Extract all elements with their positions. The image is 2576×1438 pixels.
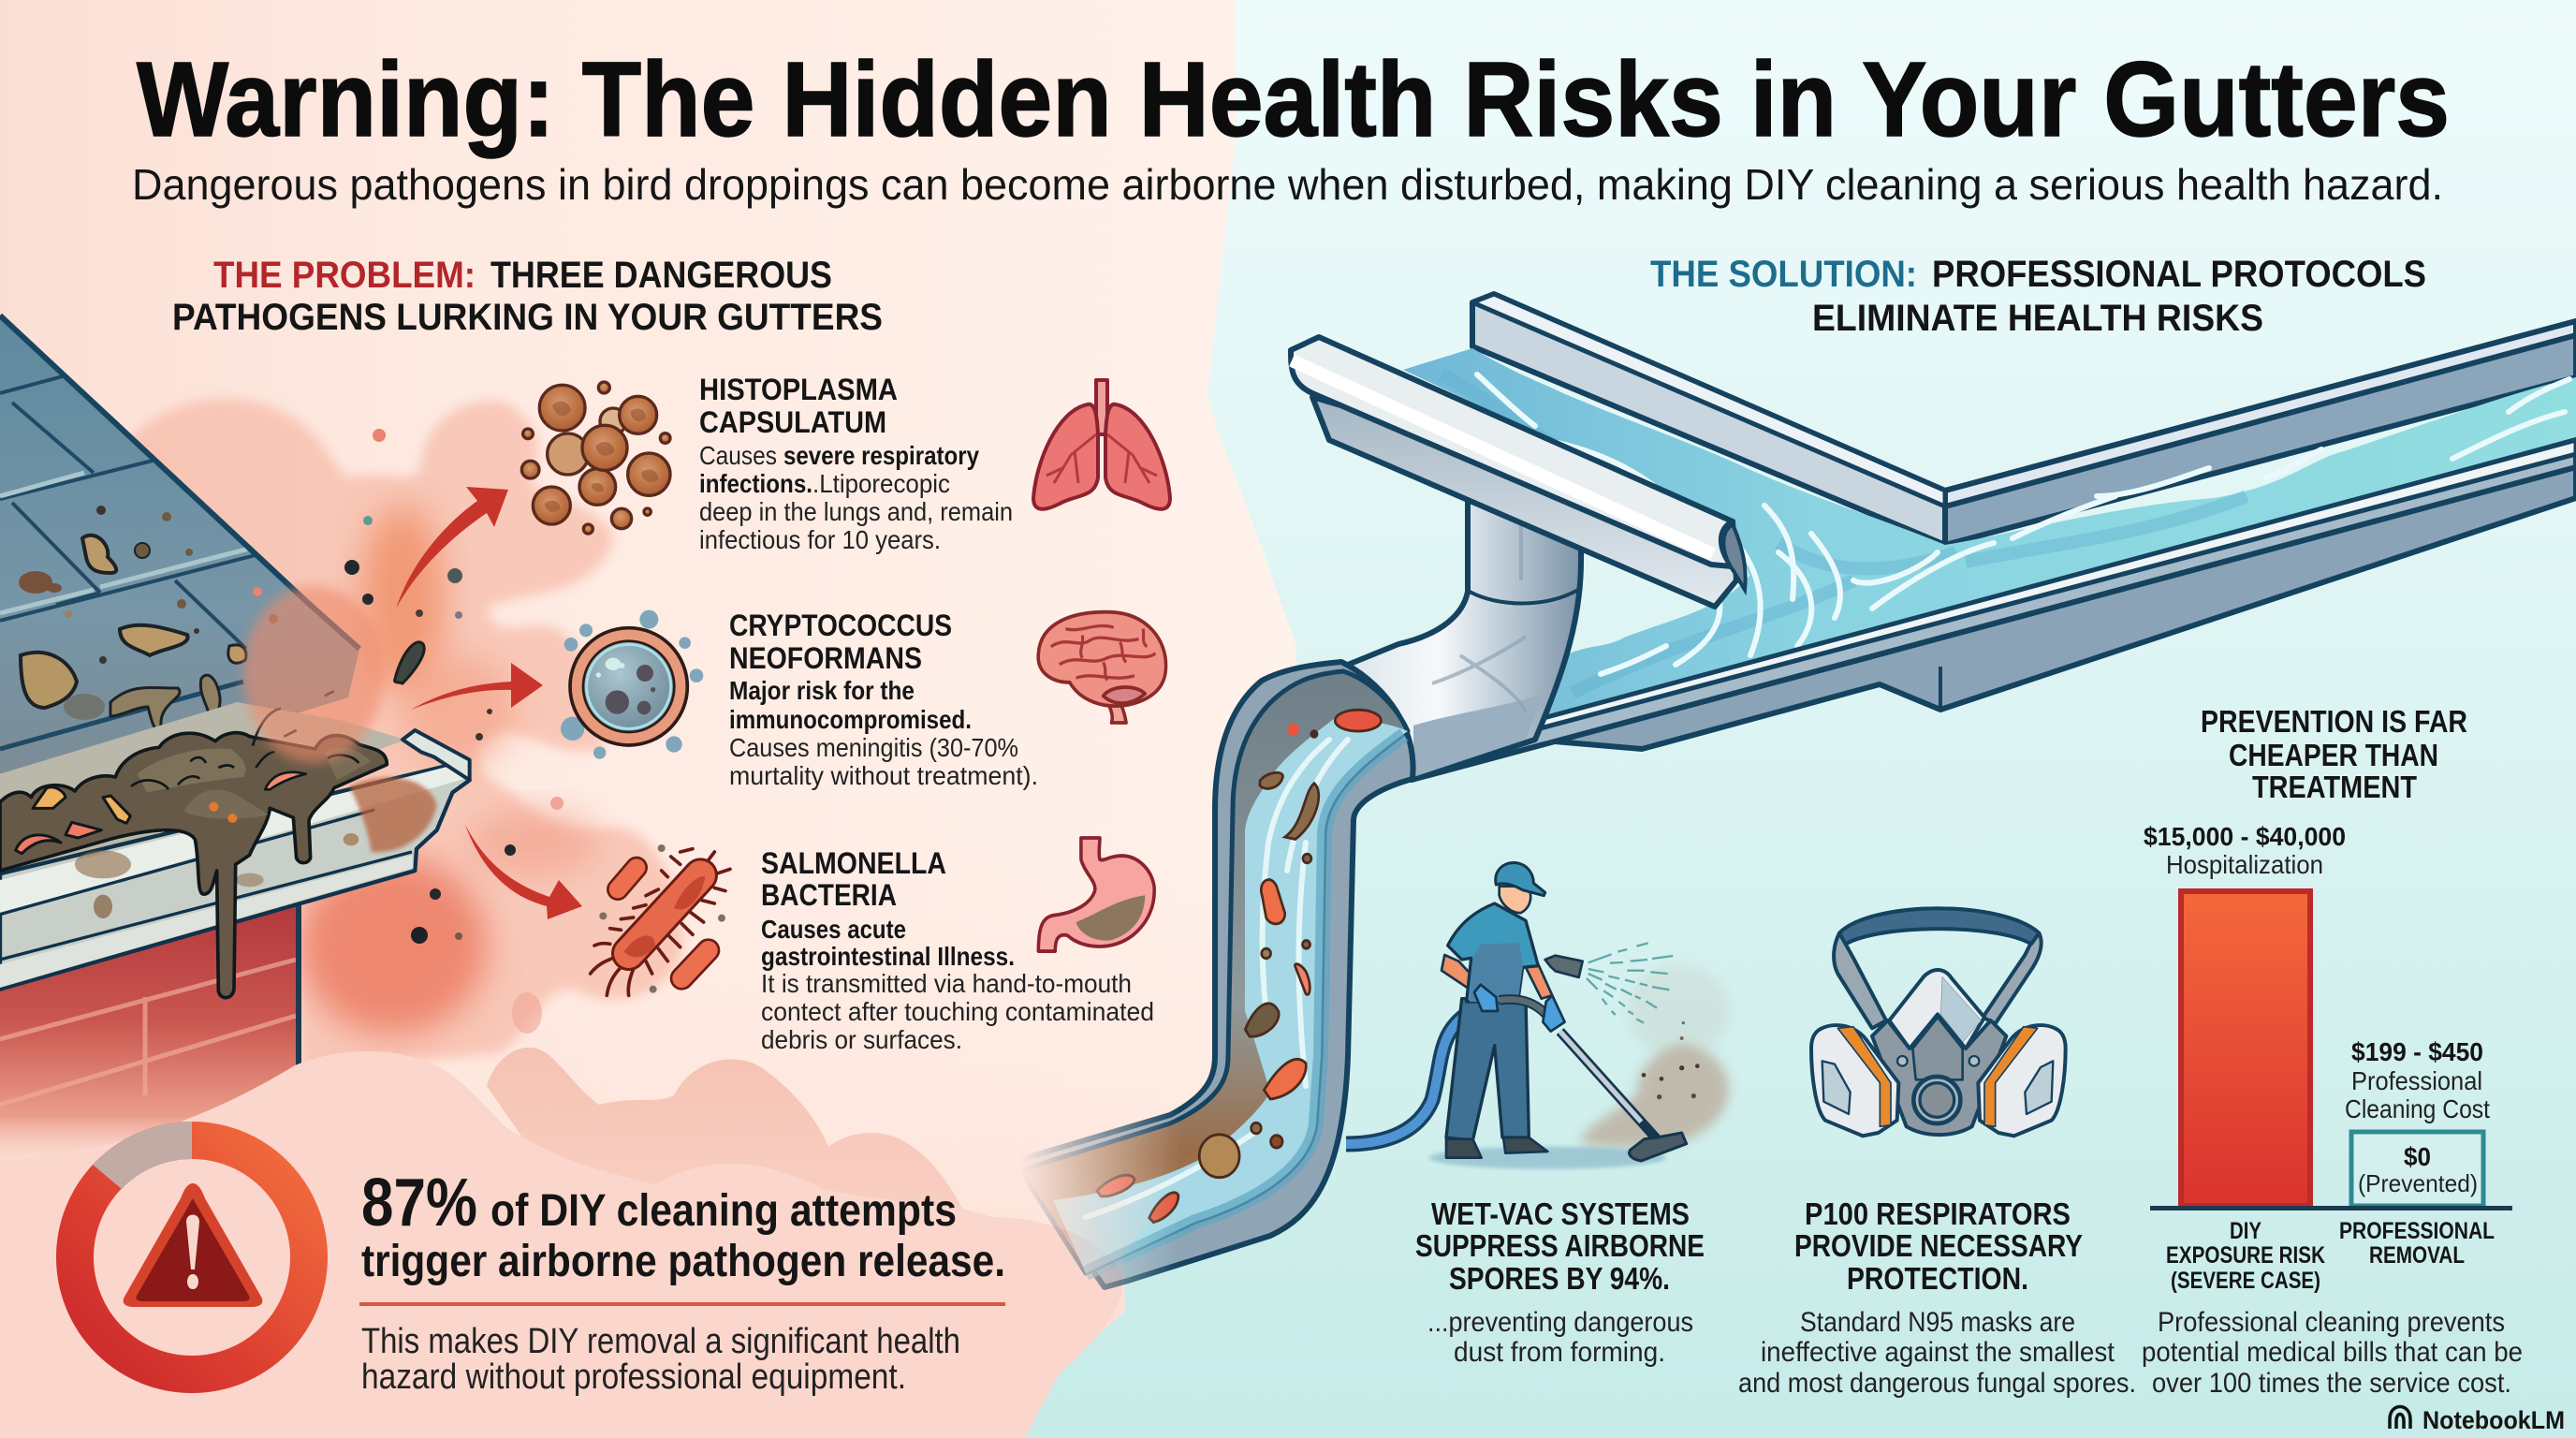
shoes [1446, 1137, 1547, 1158]
gutter body [0, 761, 470, 990]
heading: the problem: PATHOGENS LURKING IN YOUR GUTTERS [172, 297, 883, 338]
illustration: worker with wet-vac [1429, 862, 1730, 1169]
text: salmonella bacteria: SALMONELLA [761, 846, 946, 880]
debris mass and drips [0, 733, 387, 998]
DIY bar label [2144, 822, 2346, 879]
column: respirator text: PROTECTION. [1847, 1261, 2028, 1296]
text: salmonella bacteria: It is transmitted via hand-to-mouth [761, 969, 1132, 998]
chart heading: CHEAPER THAN [2229, 738, 2438, 772]
text: histoplasma capsulatum: CAPSULATUM [699, 405, 886, 439]
back wall of the left gutter [1472, 294, 1945, 545]
subtitle: Dangerous pathogens in bird droppings can become airborne when disturbed, making DIY cleaning a serious health hazard. [132, 160, 2443, 209]
stat explanation: This makes DIY removal a significant health [361, 1322, 960, 1361]
text: histoplasma capsulatum: infections. [699, 469, 812, 498]
back wall of the right gutter [1945, 321, 2576, 545]
mask body [1872, 1014, 2006, 1135]
text: salmonella bacteria: BACTERIA [761, 878, 897, 912]
left gutter trough [1312, 397, 1736, 607]
arrow: spores to salmonella [465, 825, 582, 919]
heading: the solution: PROFESSIONAL PROTOCOLS [1932, 254, 2426, 295]
arrow: spores to histoplasma [396, 487, 508, 609]
text: salmonella bacteria [761, 846, 1154, 1054]
axis labels [2166, 1218, 2495, 1294]
roof with droppings [0, 315, 359, 805]
text: cryptococcus neoformans: immunocompromised. [729, 705, 972, 734]
icon: warning ring and triangle [75, 1122, 309, 1374]
arrow: spores to cryptococcus [411, 663, 543, 710]
debris and microbes in pipe [1097, 710, 1381, 1223]
heading: the problem: THE PROBLEM: [213, 255, 476, 296]
column: wet-vac text: ...preventing dangerous [1427, 1307, 1693, 1338]
right cartridge [1978, 1025, 2066, 1136]
text: cryptococcus neoformans: CRYPTOCOCCUS [729, 609, 952, 642]
water inside pipe [1053, 716, 1408, 1273]
column: respirator text: and most dangerous fungal spores. [1738, 1368, 2136, 1399]
text: histoplasma capsulatum: HISTOPLASMA [699, 373, 898, 406]
column: respirator text [1738, 1196, 2136, 1399]
text: cryptococcus neoformans: NEOFORMANS [729, 641, 922, 675]
underside of the front gutter [1555, 467, 2576, 749]
water flow [1403, 348, 2576, 726]
gloves [1474, 985, 1565, 1032]
head and cap [1500, 887, 1530, 913]
smoke plumes rising from the gutter [122, 399, 683, 1072]
text: histoplasma capsulatum [699, 373, 1013, 554]
text: histoplasma capsulatum: Causes [699, 441, 777, 470]
fascia band under the roof [0, 702, 405, 892]
axis labels: DIY [2230, 1218, 2261, 1244]
column: wet-vac text: SUPPRESS AIRBORNE [1415, 1228, 1705, 1263]
icon: lungs [1033, 380, 1170, 509]
axis labels: (SEVERE CASE) [2171, 1268, 2320, 1294]
column: wet-vac text [1415, 1196, 1705, 1368]
downspout elbow [1343, 496, 1581, 780]
prevented value: $0 [2404, 1142, 2431, 1171]
column: wet-vac text: dust from forming. [1454, 1337, 1665, 1368]
nose piece [1889, 970, 1984, 1049]
panel: stat callout [75, 1122, 1005, 1397]
text: salmonella bacteria: contect after touching contaminated [761, 997, 1154, 1026]
gutter clogged with debris [0, 691, 470, 998]
prevented value: (Prevented) [2358, 1169, 2478, 1197]
ground shadow [1429, 1147, 1666, 1169]
icon: salmonella bacteria [591, 844, 730, 995]
prevented value [2358, 1142, 2478, 1197]
bottom cloud background [0, 1048, 1123, 1438]
professional bar label: Cleaning Cost [2345, 1094, 2490, 1123]
DIY bar label: $15,000 - $40,000 [2144, 822, 2346, 851]
chart explanation [2142, 1307, 2523, 1399]
pipe interior [1020, 671, 1408, 1273]
DIY bar label: Hospitalization [2166, 850, 2323, 879]
bar chart: prevention vs treatment [2142, 704, 2523, 1399]
title: Warning: The Hidden Health Risks in Your Gutters [137, 40, 2450, 158]
column: respirator text: Standard N95 masks are [1800, 1307, 2075, 1338]
vacuum hose from pipe to worker [1346, 1008, 1476, 1144]
text: salmonella bacteria: gastrointestinal Illness. [761, 942, 1015, 971]
column: respirator text: ineffective against the smallest [1761, 1337, 2115, 1368]
stat explanation: hazard without professional equipment. [361, 1357, 906, 1397]
statistic text: 87% [361, 1166, 477, 1240]
column: respirator text: P100 RESPIRATORS [1805, 1196, 2071, 1231]
left cartridge [1811, 1025, 1898, 1136]
dust patch [1579, 964, 1730, 1148]
heading: the solution: ELIMINATE HEALTH RISKS [1812, 298, 2263, 339]
statistic text [361, 1166, 1005, 1286]
professional bar label [2345, 1037, 2490, 1123]
vacuum wand [1500, 999, 1552, 1022]
front lip of the right gutter [1412, 440, 2576, 780]
leaf fragments [33, 787, 66, 808]
pipe outer metal [1016, 662, 1413, 1287]
column: respirator text: PROVIDE NECESSARY [1794, 1228, 2083, 1263]
heading: the solution [1650, 254, 2426, 339]
chart explanation: Professional cleaning prevents [2158, 1307, 2505, 1338]
illustration: cut-away downspout with debris [1016, 662, 1413, 1287]
chart heading: TREATMENT [2252, 770, 2417, 804]
professional bar [2351, 1132, 2483, 1206]
icon: cryptococcus cell [561, 610, 703, 759]
smoke veil over roof corner [243, 585, 384, 763]
text: cryptococcus neoformans: murtality without treatment). [729, 761, 1038, 790]
arms [1442, 955, 1552, 999]
icon: brain [1038, 612, 1166, 723]
text: salmonella bacteria: debris or surfaces. [761, 1025, 962, 1054]
statistic text: trigger airborne pathogen release. [361, 1237, 1005, 1286]
text: histoplasma capsulatum: infectious for 10 years. [699, 525, 941, 554]
stat explanation [361, 1322, 960, 1397]
text: salmonella bacteria: Causes acute [761, 915, 906, 944]
professional bar label: Professional [2351, 1066, 2482, 1095]
text: cryptococcus neoformans: Major risk for the [729, 676, 915, 705]
chart heading: PREVENTION IS FAR [2201, 704, 2467, 739]
icon: histoplasma spores [521, 382, 670, 534]
shirt [1448, 903, 1538, 1002]
brick wall below the gutter [0, 899, 299, 1170]
text: cryptococcus neoformans [729, 609, 1038, 790]
illustration: clean gutter with flowing water [1291, 294, 2576, 780]
pants [1446, 999, 1529, 1140]
column: wet-vac text: SPORES BY 94%. [1449, 1261, 1670, 1296]
head strap [1834, 908, 2042, 1028]
text: histoplasma capsulatum: .Ltiporecopic [812, 469, 950, 498]
illustration: P100 respirator [1811, 908, 2066, 1136]
statistic text: of DIY cleaning attempts [490, 1186, 957, 1236]
heading: the problem [172, 255, 883, 338]
column: wet-vac text: WET-VAC SYSTEMS [1431, 1196, 1690, 1231]
chart explanation: potential medical bills that can be [2142, 1337, 2523, 1368]
heading: the solution: THE SOLUTION: [1650, 254, 1917, 295]
axis labels: PROFESSIONAL [2339, 1218, 2495, 1244]
text: histoplasma capsulatum: severe respiratory [783, 441, 979, 470]
left gutter lip [1291, 337, 1733, 566]
text: cryptococcus neoformans: Causes meningitis (30-70% [729, 733, 1018, 762]
heading: the problem: THREE DANGEROUS [490, 255, 832, 296]
chart explanation: over 100 times the service cost. [2152, 1368, 2511, 1399]
nozzle and spray [1545, 956, 1583, 977]
professional bar label: $199 - $450 [2351, 1037, 2483, 1066]
chart heading [2201, 704, 2467, 804]
icon: stomach [1038, 838, 1154, 951]
NotebookLM logo and wordmark: NotebookLM [2422, 1406, 2565, 1434]
DIY bar [2181, 891, 2310, 1206]
text: histoplasma capsulatum: deep in the lungs and, remain [699, 497, 1013, 526]
axis labels: REMOVAL [2369, 1242, 2465, 1269]
axis labels: EXPOSURE RISK [2166, 1242, 2325, 1269]
